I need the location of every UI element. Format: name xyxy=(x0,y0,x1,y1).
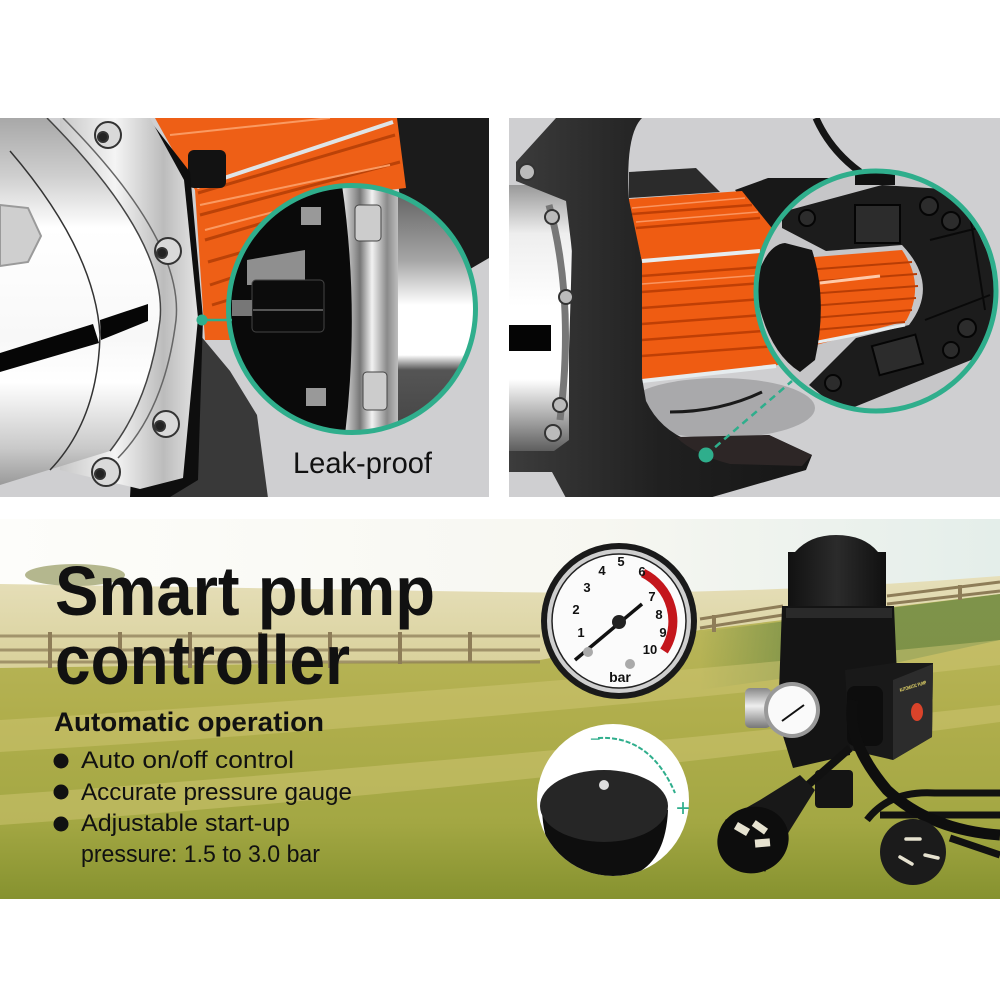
dome cap xyxy=(788,535,886,610)
pressure gauge: 2 xyxy=(572,602,580,617)
small gauge xyxy=(764,682,820,738)
steel tie rods xyxy=(642,251,776,381)
black collar xyxy=(755,243,821,372)
collar and body xyxy=(778,606,897,768)
panel: leak-proof pump close-up xyxy=(0,118,489,498)
feature list: pressure: 1.5 to 3.0 bar xyxy=(81,841,320,868)
thin cable xyxy=(808,748,850,785)
adjust cap inset: + xyxy=(676,795,690,822)
steel rod xyxy=(818,325,905,342)
pressure gauge xyxy=(541,543,697,699)
distant hills xyxy=(0,576,1000,668)
pressure gauge: 8 xyxy=(655,607,663,622)
feature list xyxy=(54,747,352,868)
red zone xyxy=(643,573,673,651)
steel pump head xyxy=(509,185,571,455)
mown field stripes xyxy=(0,640,1000,825)
foot highlight xyxy=(676,435,812,466)
steel band xyxy=(342,188,398,430)
threaded studs xyxy=(301,207,321,225)
controller unit xyxy=(708,535,1000,885)
pressure gauge: 10 xyxy=(643,642,657,657)
black pump bracket xyxy=(509,118,812,498)
end cap arc xyxy=(10,151,100,470)
trees xyxy=(25,564,125,586)
steel body xyxy=(398,197,473,421)
power cable xyxy=(816,118,860,172)
pressure gauge: 3 xyxy=(583,580,591,595)
red button xyxy=(911,703,923,721)
panel: pump side view xyxy=(509,118,1000,498)
pressure gauge: 5 xyxy=(617,554,625,569)
outlet thread xyxy=(815,770,853,808)
black motor rear cap xyxy=(392,118,489,272)
label: Leak-proof: Leak-proof xyxy=(293,447,433,480)
subheading: Automatic operation xyxy=(54,707,324,737)
flange bolts xyxy=(519,164,573,441)
black flange edge xyxy=(130,118,203,497)
feature list: Adjustable start-up xyxy=(81,810,290,837)
panel: smart pump controller: controller xyxy=(55,621,350,699)
adjust cap inset xyxy=(537,724,690,880)
zoom circle: underside xyxy=(755,171,1000,412)
black pump bracket xyxy=(170,338,268,497)
pressure gauge: 9 xyxy=(659,625,667,640)
grass field xyxy=(0,594,1000,899)
mains plug xyxy=(880,819,946,885)
fences xyxy=(0,582,1000,668)
steel flange plate xyxy=(60,118,198,489)
zoom circle: seal detail xyxy=(228,185,478,435)
floor shadow xyxy=(644,378,815,436)
steel gauge knob xyxy=(745,688,771,728)
steel cylinder body xyxy=(0,118,160,485)
loose cable xyxy=(670,392,762,412)
heading: Smart pump xyxy=(55,552,435,630)
callout line and dot xyxy=(698,381,792,462)
end bolt xyxy=(0,205,41,266)
rotation arrow xyxy=(598,738,675,793)
pressure gauge: 1 xyxy=(577,625,585,640)
cord coil xyxy=(867,793,1000,855)
feature list: Auto on/off control xyxy=(81,747,294,774)
cable glands xyxy=(847,686,883,746)
steel tie rod xyxy=(197,122,393,187)
pressure gauge: 4 xyxy=(598,563,606,578)
pressure gauge: bar xyxy=(609,669,631,685)
socket plug xyxy=(725,775,815,872)
callout dot and leader xyxy=(196,314,232,326)
orange motor fins xyxy=(155,118,406,340)
orange motor body xyxy=(628,191,778,382)
thick power cable xyxy=(852,700,1000,835)
panel: smart pump controller xyxy=(0,519,1000,899)
pressure gauge: 6 xyxy=(638,564,646,579)
orange motor xyxy=(814,250,916,344)
pressure gauge: 7 xyxy=(648,589,656,604)
mounting plate xyxy=(782,185,1000,412)
control panel label: AUTOMATIC PUMP xyxy=(899,680,928,694)
dark field shade xyxy=(700,594,1000,690)
motor rear housing xyxy=(735,178,829,228)
control box xyxy=(845,663,933,760)
black reflection stripe xyxy=(0,304,148,372)
black knob xyxy=(188,150,226,188)
feature list: Accurate pressure gauge xyxy=(81,779,352,806)
black top box xyxy=(629,168,720,198)
adjust cap inset: − xyxy=(590,729,601,749)
plate holes xyxy=(799,197,976,391)
flange bolts xyxy=(92,122,181,486)
